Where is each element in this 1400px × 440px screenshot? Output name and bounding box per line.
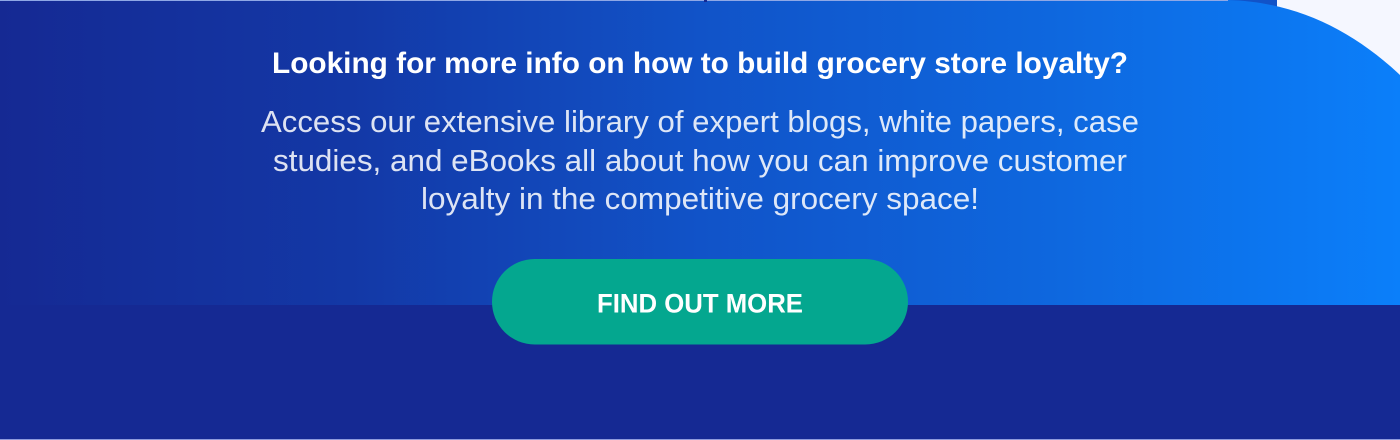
body text: Access our extensive library of expert blogs, white papers, case [261,104,1139,139]
lower navy band [0,305,1400,439]
body text [261,104,1139,216]
bottom edge highlight [0,439,1400,440]
button label: FIND OUT MORE [597,288,803,318]
gradient panel [0,0,1400,306]
top edge highlight [0,0,1228,1]
body text: loyalty in the competitive grocery space! [421,181,979,216]
dark corner behind curve [1228,0,1277,12]
heading: Looking for more info on how to build grocery store loyalty? [272,47,1128,80]
body text: studies, and eBooks all about how you can improve customer [273,143,1127,178]
button [492,259,908,344]
top edge marker [704,0,707,2]
